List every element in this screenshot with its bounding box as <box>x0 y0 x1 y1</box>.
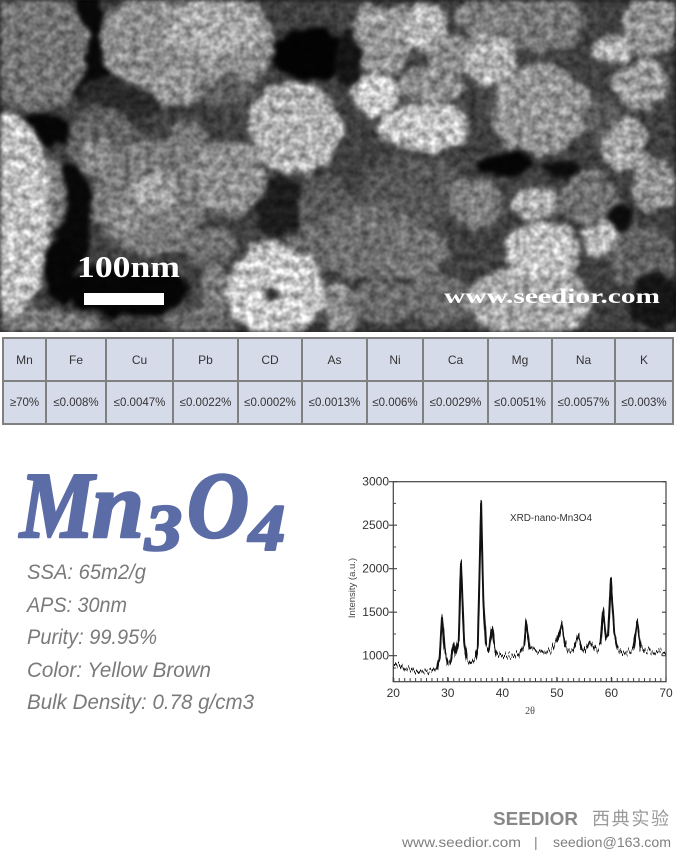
composition table: ≤0.0013% <box>309 396 360 408</box>
title: Mn3O4: O <box>187 455 249 558</box>
composition table: ≤0.006% <box>372 396 418 408</box>
x axis labels: 60 <box>605 686 618 700</box>
specifications list: SSA: 65m2/g <box>27 560 146 584</box>
title: Mn3O4 <box>18 455 285 565</box>
composition table: Cu <box>132 352 147 366</box>
specifications list: Color: Yellow Brown <box>27 658 211 682</box>
x axis title: 2θ <box>525 706 535 717</box>
composition table <box>2 337 674 425</box>
x axis labels: 50 <box>550 686 564 700</box>
composition table: Fe <box>69 352 83 366</box>
composition table: ≤0.0022% <box>180 396 231 408</box>
composition table: ≤0.0047% <box>114 396 165 408</box>
chart annotation: XRD-nano-Mn3O4 <box>510 513 592 524</box>
specifications list <box>25 560 254 714</box>
title: Mn3O4: 3 <box>144 492 182 565</box>
specifications list: Purity: 99.95% <box>27 625 157 649</box>
x axis labels: 20 <box>387 686 400 700</box>
composition table: As <box>327 352 342 366</box>
contact line: seedion@163.com <box>553 834 671 850</box>
y axis labels: 2000 <box>362 562 389 576</box>
composition table: ≤0.0029% <box>430 396 481 408</box>
composition table: ≤0.0057% <box>558 396 609 408</box>
plot frame and ticks <box>389 482 666 682</box>
x axis labels <box>387 686 673 700</box>
brand name: SEEDIOR <box>493 809 578 829</box>
composition table: ≥70% <box>10 396 39 408</box>
composition table: ≤0.003% <box>621 396 667 408</box>
title: Mn3O4: 4 <box>247 492 285 565</box>
scale bar <box>84 293 164 305</box>
contact line: www.seedior.com <box>401 834 521 850</box>
composition table: Na <box>576 352 591 366</box>
y axis labels <box>362 474 389 662</box>
y axis labels: 1500 <box>362 605 389 619</box>
y axis title: Intensity (a.u.) <box>347 558 358 618</box>
title: Mn3O4: M <box>18 455 97 558</box>
x axis labels: 30 <box>441 686 455 700</box>
y axis labels: 3000 <box>362 474 389 488</box>
watermark url: www.seedior.com <box>444 284 661 308</box>
composition table: ≤0.0051% <box>494 396 546 408</box>
composition table: Mn <box>16 352 33 366</box>
footer brand <box>401 809 671 850</box>
chinese brand name: 西典实验 <box>592 809 669 829</box>
diffraction curve <box>393 503 666 672</box>
specifications list: APS: 30nm <box>25 593 127 617</box>
contact line: | <box>534 834 538 850</box>
XRD chart <box>347 474 673 717</box>
title: Mn3O4: n <box>92 455 144 558</box>
contact line <box>401 834 671 850</box>
x axis labels: 70 <box>659 686 673 700</box>
composition table: Mg <box>512 352 528 366</box>
y axis labels: 2500 <box>362 518 389 532</box>
specifications list: Bulk Density: 0.78 g/cm3 <box>27 690 254 714</box>
composition table: Ca <box>448 352 463 366</box>
composition table: ≤0.0002% <box>244 396 296 408</box>
composition table: CD <box>261 352 279 366</box>
composition table: K <box>640 352 648 366</box>
composition table: Ni <box>389 352 401 366</box>
SEM micrograph photo <box>0 0 676 332</box>
x axis labels: 40 <box>496 686 509 700</box>
scale bar label: 100nm <box>77 249 180 284</box>
y axis labels: 1000 <box>362 648 389 662</box>
composition table: ≤0.008% <box>53 396 99 408</box>
composition table: Pb <box>198 352 213 366</box>
